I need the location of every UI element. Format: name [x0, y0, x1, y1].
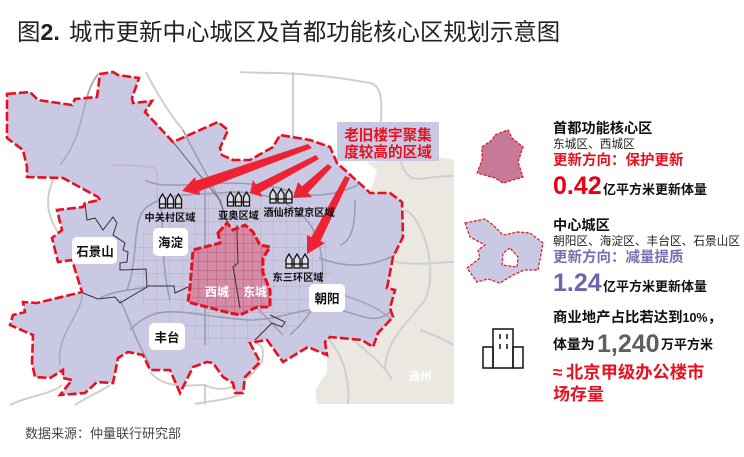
- text: commercial property note: 商业地产占比若达到10%，: [553, 308, 722, 326]
- callout: older building clusters: [337, 122, 439, 161]
- arrow: to Zhongguancun: [182, 144, 312, 195]
- stat: central city volume: [553, 269, 707, 297]
- stat: central city volume: 1.24: [553, 269, 602, 297]
- stat: core volume: 亿平方米更新体量: [603, 182, 707, 197]
- label: Chaoyang: 朝阳: [314, 291, 340, 306]
- title: 图2.: [17, 19, 60, 45]
- label: Jiuxianqiao Wangjing: 酒仙桥望京区域: [263, 206, 335, 219]
- label: Haidian: [153, 228, 188, 256]
- heading: core: 首都功能核心区: [553, 120, 652, 137]
- legend: capital core: [477, 120, 707, 200]
- map: urban street grid: [132, 193, 332, 344]
- source note: 数据来源：仲量联行研究部: [25, 426, 181, 441]
- map: capital core district: [188, 223, 270, 315]
- map: [7, 72, 454, 405]
- text: core direction: 更新方向：保护更新: [553, 151, 684, 169]
- icon: buildings East Third Ring: [286, 254, 308, 268]
- callout: older building clusters: 度较高的区域: [344, 143, 432, 161]
- legend: central city: [465, 217, 740, 297]
- map: central city district area: [7, 72, 403, 395]
- icon: office building: [483, 329, 523, 368]
- text: commercial property note: 北京甲级办公楼市: [566, 362, 704, 382]
- map: outer roads: [10, 72, 454, 405]
- label: Zhongguancun: 中关村区域: [145, 211, 195, 224]
- label: Tongzhou: 通州: [408, 369, 432, 383]
- label: East Third Ring: 东三环区域: [273, 271, 323, 284]
- callout: older building clusters: 老旧楼宇聚集: [344, 126, 432, 144]
- icon: buildings Jiuxianqiao: [270, 189, 292, 203]
- map: Tongzhou beige area: [315, 158, 454, 404]
- text: commercial property note: 体量为: [553, 336, 595, 352]
- text: central city districts: 朝阳区、海淀区、丰台区、石景山区: [553, 234, 740, 248]
- label: Xicheng: 西城: [205, 284, 229, 299]
- icon: buildings Zhongguancun: [160, 194, 182, 208]
- label: Chaoyang: [309, 284, 345, 312]
- map: district boundaries: [83, 142, 285, 340]
- arrow: to Jiuxianqiao: [293, 164, 332, 198]
- label: Shijingshan: [72, 237, 117, 264]
- icon: buildings Yaao: [228, 192, 250, 206]
- icon: core shape: [477, 130, 523, 183]
- label: Dongcheng: 东城: [243, 284, 267, 299]
- text: commercial property note: [553, 308, 722, 404]
- text: core districts: 东城区、西城区: [553, 138, 635, 151]
- icon: central city shape: [465, 219, 543, 283]
- label: Fengtai: [149, 323, 185, 350]
- map: outer boundary dashed: [7, 72, 403, 395]
- label: Shijingshan: 石景山: [76, 245, 114, 259]
- text: central city direction: 更新方向：减量提质: [553, 248, 684, 266]
- heading: central city: 中心城区: [553, 217, 610, 234]
- text: commercial property note: ≈: [553, 362, 562, 382]
- label: Yaao: 亚奥区域: [218, 209, 259, 222]
- stat: core volume: [553, 172, 707, 200]
- map: ring roads: [59, 75, 395, 365]
- text: commercial property note: 万平方米: [661, 337, 713, 352]
- label: Haidian: 海淀: [158, 235, 183, 250]
- label: Fengtai: 丰台: [154, 330, 180, 345]
- stat: core volume: 0.42: [553, 172, 602, 200]
- stat: central city volume: 亿平方米更新体量: [603, 279, 707, 294]
- arrow: to Yaao: [250, 155, 319, 197]
- title: 城市更新中心城区及首都功能核心区规划示意图: [69, 19, 560, 45]
- text: commercial property note: 场存量: [553, 384, 604, 404]
- arrow: to East Third Ring: [307, 176, 350, 254]
- text: commercial property note: 1,240: [597, 330, 660, 358]
